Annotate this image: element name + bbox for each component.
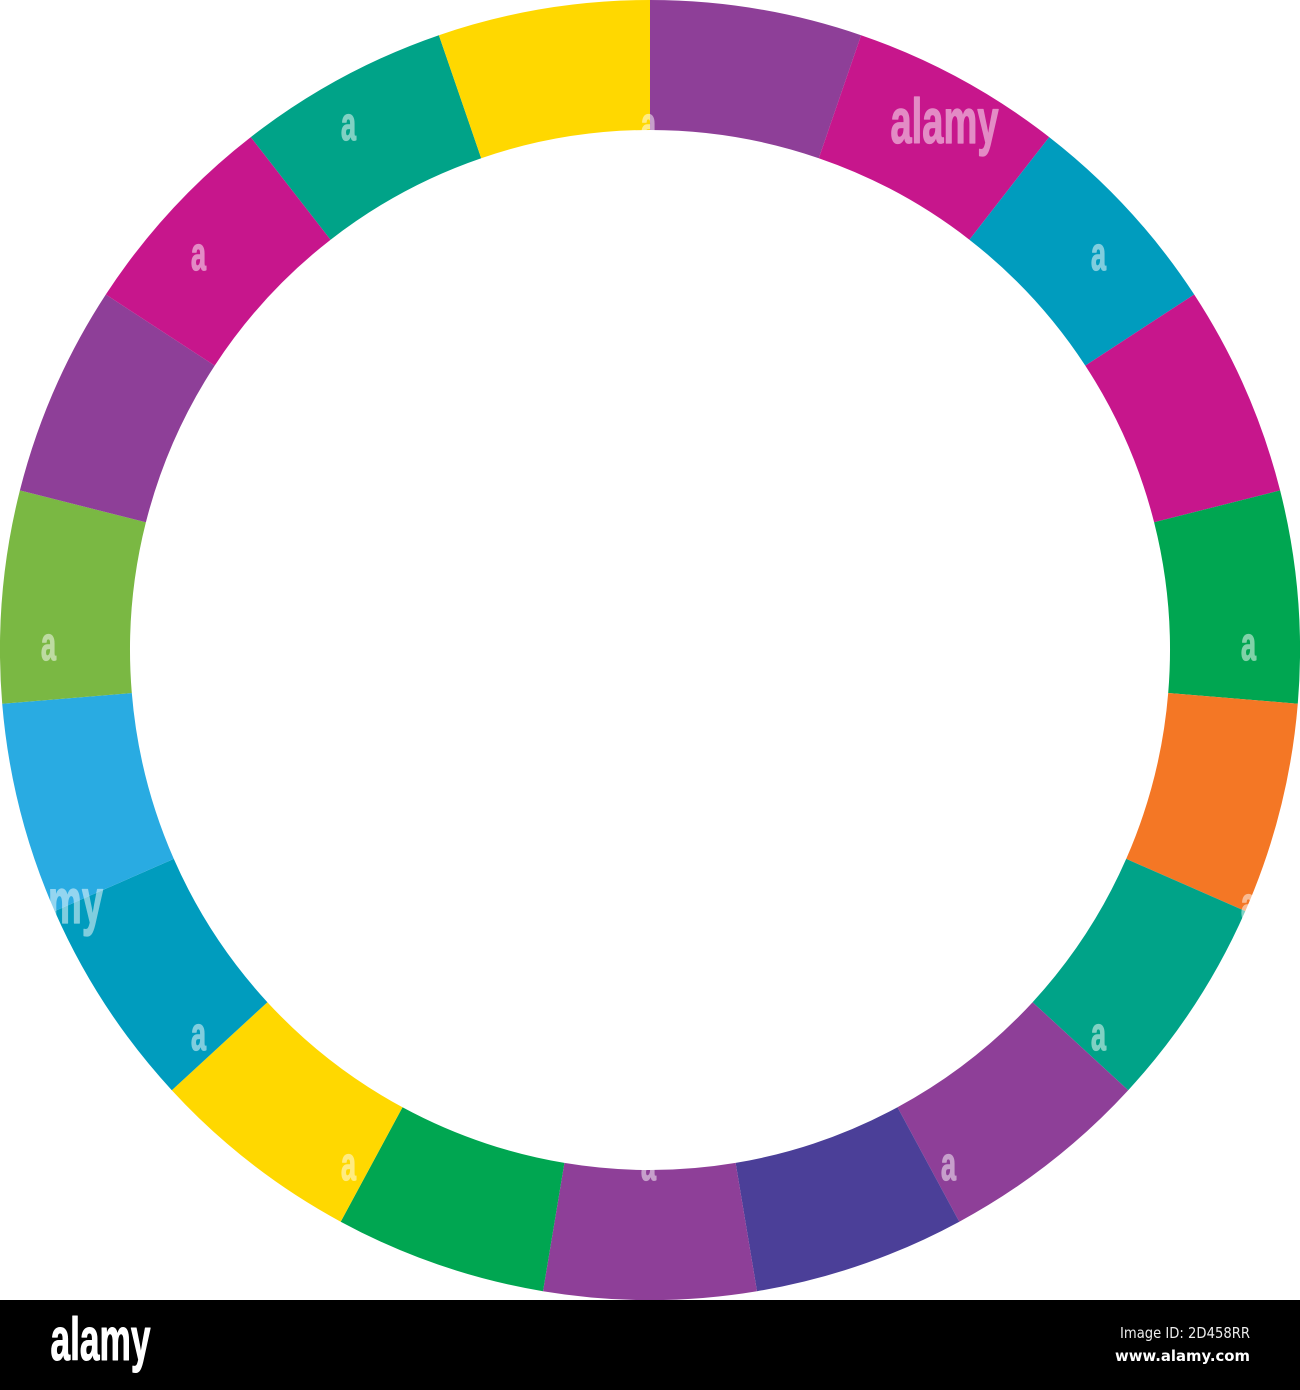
watermarks on ring [41, 87, 1256, 1190]
watermark: small marks: a [1241, 877, 1256, 930]
image id: Image ID: 2D458RR [1120, 1324, 1250, 1342]
watermark: small marks: a [191, 227, 206, 280]
segment 3: blue [969, 137, 1194, 366]
segment 15: light green [0, 490, 146, 704]
footer bar [0, 1300, 1300, 1390]
watermark: small marks: a [1241, 617, 1256, 670]
watermark: small marks [41, 97, 1256, 1190]
watermark: small marks: a [341, 1137, 356, 1190]
segment 5: green [1154, 490, 1300, 704]
segment 14: light blue [2, 693, 174, 911]
watermark: small marks: a [641, 97, 656, 150]
segment 11: green [341, 1107, 564, 1291]
segment 1: purple [650, 0, 861, 158]
segment 19: yellow [439, 0, 650, 158]
segment 4: magenta [1085, 294, 1280, 522]
watermark: small marks: a [1091, 1007, 1106, 1060]
watermark: small marks: a [941, 1137, 956, 1190]
segment 18: teal [251, 35, 481, 240]
segment 9: indigo [736, 1107, 959, 1291]
segment 16: purple [20, 294, 215, 522]
segment 17: magenta [106, 137, 331, 366]
watermark: small marks: a [41, 617, 56, 670]
segment 2: magenta [819, 35, 1049, 240]
segment 10: purple [543, 1163, 757, 1300]
segment 7: teal [1033, 859, 1245, 1090]
segment 12: yellow [172, 1002, 402, 1222]
segment 13: blue [55, 859, 267, 1090]
footer logo: alamy [50, 1306, 151, 1373]
watermark: small marks: a [191, 1007, 206, 1060]
footer background [0, 1300, 1300, 1390]
watermark: main logo: alamy [890, 87, 998, 157]
watermark: small marks: a [341, 97, 356, 150]
segment 6: orange [1126, 693, 1298, 911]
website: www.alamy.com [1115, 1347, 1250, 1365]
watermark: small marks: a [641, 1137, 656, 1190]
segment 8: purple [898, 1002, 1128, 1222]
watermark: small marks: a [1091, 227, 1106, 280]
watermark: partial logo: my [48, 867, 103, 937]
